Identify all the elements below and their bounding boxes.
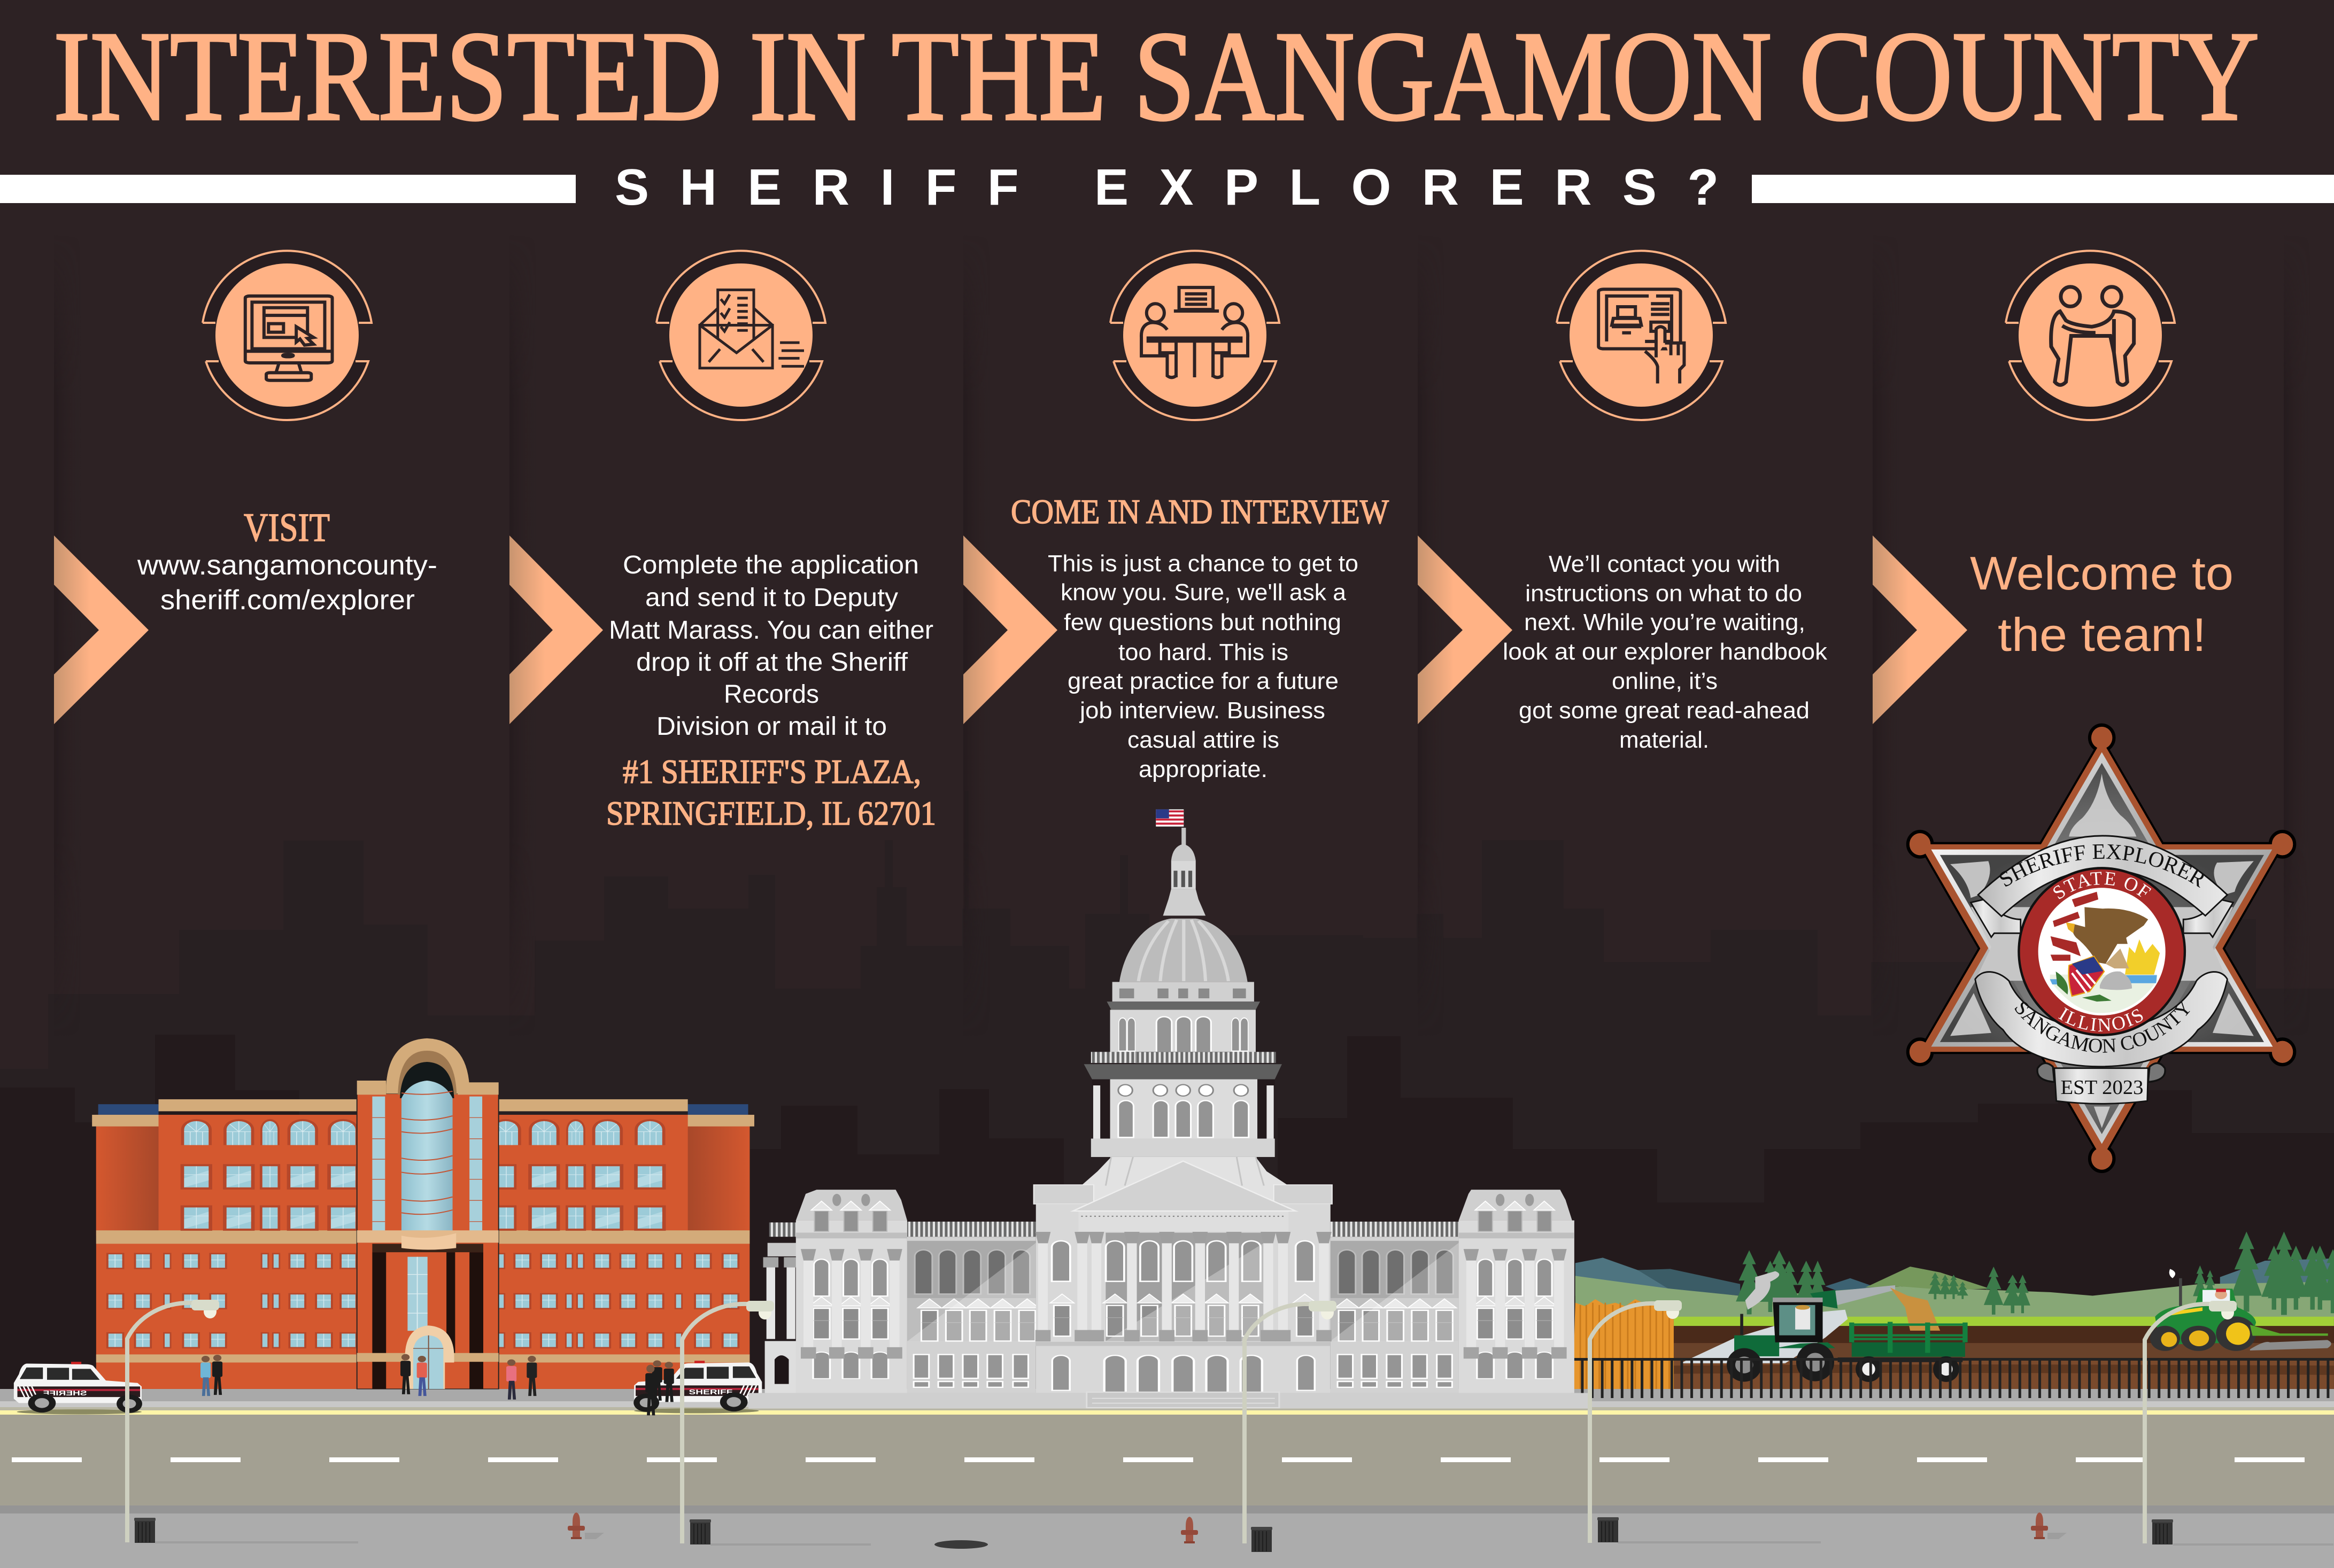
dome bbox=[1081, 828, 1288, 1204]
step 2 text: Complete the application bbox=[623, 551, 919, 579]
step 2 text: #1 SHERIFF'S PLAZA, bbox=[623, 753, 921, 790]
chevron arrow 1 bbox=[54, 535, 149, 724]
step 4 text: got some great read-ahead bbox=[1519, 697, 1810, 724]
step 3 text bbox=[1011, 493, 1389, 782]
people bbox=[200, 1354, 674, 1415]
step 2 text: and send it to Deputy bbox=[645, 584, 898, 612]
chevron arrow 2 bbox=[509, 535, 603, 724]
sidewalk and road bbox=[0, 1389, 2334, 1568]
step 1 text: www.sangamoncounty- bbox=[137, 550, 437, 581]
sheriff vehicle left bbox=[14, 1362, 142, 1414]
step 3 text: appropriate. bbox=[1139, 756, 1268, 782]
step 2 text: Matt Marass. You can either bbox=[609, 616, 933, 645]
right white bar bbox=[1752, 175, 2334, 203]
icon: tablet and hand bbox=[1557, 251, 1726, 420]
step 1 text: sheriff.com/explorer bbox=[160, 585, 415, 616]
far-left annex bbox=[763, 1222, 799, 1393]
manhole cover bbox=[934, 1540, 988, 1549]
sheriff vehicle right bbox=[633, 1361, 762, 1413]
step 3 text: casual attire is bbox=[1127, 727, 1279, 753]
capitol plinth and steps bbox=[748, 1392, 1588, 1409]
badge: est 2023: EST 2023 bbox=[2060, 1076, 2144, 1099]
badge: state of text: STATE OF bbox=[2053, 872, 2151, 899]
central portico bbox=[1034, 1161, 1332, 1393]
step 2 text: Records bbox=[724, 680, 819, 709]
step 3 text: know you. Sure, we'll ask a bbox=[1061, 579, 1347, 606]
step 4 text: look at our explorer handbook bbox=[1503, 639, 1828, 665]
step 3 text: This is just a chance to get to bbox=[1048, 550, 1358, 577]
illinois state capitol bbox=[748, 809, 1588, 1409]
chevron arrow 3 bbox=[963, 535, 1057, 724]
step 4 text bbox=[1503, 551, 1828, 753]
step 2 text: Division or mail it to bbox=[656, 712, 887, 741]
side pavilions bbox=[796, 1190, 1574, 1393]
step 4 text: online, it’s bbox=[1612, 668, 1718, 694]
badge: illinois text: ILLINOIS bbox=[2058, 1007, 2143, 1031]
step 3 text: too hard. This is bbox=[1118, 639, 1288, 665]
shadows on pavement bbox=[155, 1533, 2333, 1546]
sheriff explorer badge bbox=[1906, 724, 2297, 1173]
column shadow edges bbox=[54, 389, 2285, 845]
icon: application envelope bbox=[656, 251, 825, 420]
step 1 text: VISIT bbox=[244, 506, 330, 550]
step 4 text: material. bbox=[1619, 727, 1709, 753]
chevron arrow 5 bbox=[1873, 535, 1967, 724]
street lamps bbox=[127, 1300, 2237, 1543]
step 3 text: job interview. Business bbox=[1079, 697, 1325, 724]
step 5 text: Welcome to bbox=[1970, 547, 2233, 600]
farm scene bbox=[1573, 1232, 2334, 1389]
county sheriff building bbox=[14, 1038, 762, 1415]
step 2 text bbox=[606, 551, 936, 832]
step 1 text bbox=[137, 506, 437, 616]
step 2 text: drop it off at the Sheriff bbox=[636, 648, 908, 677]
icon: handshake bbox=[2006, 251, 2175, 420]
step 5 text: the team! bbox=[1998, 608, 2206, 661]
step 3 text: COME IN AND INTERVIEW bbox=[1011, 493, 1389, 531]
wings bbox=[907, 1222, 1459, 1393]
flag bbox=[1156, 809, 1184, 827]
left white bar bbox=[0, 175, 576, 203]
subtitle: SHERIFF EXPLORERS? bbox=[615, 159, 1719, 216]
chevron arrow 4 bbox=[1418, 535, 1512, 724]
step 4 text: instructions on what to do bbox=[1525, 580, 1802, 607]
step 4 text: next. While you’re waiting, bbox=[1524, 609, 1805, 635]
badge: sangamon county text: SANGAMON COUNTY bbox=[2014, 1002, 2190, 1053]
step 5 text bbox=[1970, 547, 2233, 661]
step 4 text: We’ll contact you with bbox=[1549, 551, 1780, 577]
trash cans bbox=[134, 1517, 2173, 1552]
icon: interview at table bbox=[1110, 251, 1279, 420]
step 3 text: great practice for a future bbox=[1068, 668, 1339, 694]
fire hydrants bbox=[568, 1512, 2048, 1543]
skyline silhouettes bbox=[0, 791, 2334, 1568]
step 3 text: few questions but nothing bbox=[1064, 609, 1341, 635]
badge: sheriff explorer text: SHERIFF EXPLORER bbox=[2000, 844, 2204, 888]
farm fence bbox=[1571, 1358, 2334, 1398]
step 2 text: SPRINGFIELD, IL 62701 bbox=[606, 795, 936, 832]
icon: computer monitor bbox=[203, 251, 372, 420]
